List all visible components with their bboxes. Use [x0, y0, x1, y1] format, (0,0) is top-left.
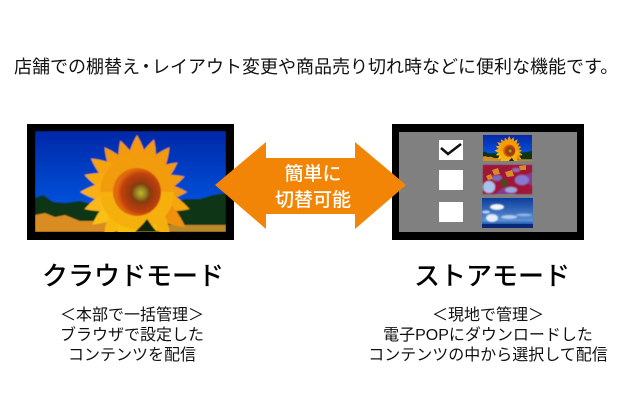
text: cloud mode description: コンテンツを配信 [68, 347, 196, 364]
image: sunflower [35, 131, 226, 232]
text: cloud mode description: ＜本部で一括管理＞ [60, 307, 204, 324]
text: store mode description: ＜現地で管理＞ [432, 307, 544, 324]
text: store mode description: 電子POPにダウンロードした [383, 327, 593, 344]
thumbnail: autumn leaves [483, 165, 532, 194]
heading: cloud mode: クラウドモード [42, 261, 224, 291]
panel: cloud mode screen [27, 124, 234, 250]
text: cloud mode description [60, 306, 204, 364]
arrow label: 簡単に [284, 164, 342, 185]
checkbox: empty 2 [439, 202, 463, 222]
thumbnail: blue sky [482, 198, 533, 228]
checkbox: empty 1 [439, 170, 463, 190]
text: store mode description [368, 306, 608, 364]
text: store mode description: コンテンツの中から選択して配信 [368, 347, 608, 364]
panel: store mode screen [215, 124, 584, 240]
checkbox: checked [439, 140, 463, 160]
arrow label: 切替可能 [275, 190, 351, 211]
title: 店舗での棚替え・レイアウト変更や商品売り切れ時などに便利な機能です。 [14, 57, 618, 77]
heading: store mode: ストアモード [414, 261, 570, 291]
arrow: two-way orange [215, 142, 406, 229]
thumbnail: sunflower [483, 135, 532, 161]
text: cloud mode description: ブラウザで設定した [60, 327, 204, 344]
arrow label [275, 164, 351, 211]
